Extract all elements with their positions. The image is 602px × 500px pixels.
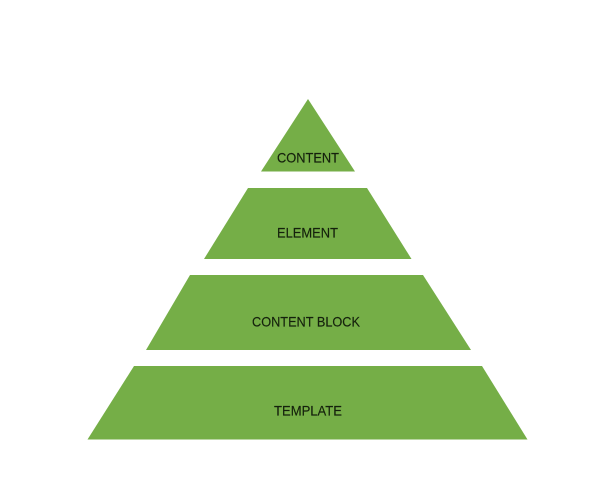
tier 3: content block	[146, 275, 471, 350]
tier 2: element: ELEMENT	[277, 226, 338, 240]
tier 4: template	[88, 366, 528, 440]
tier 3: content block: CONTENT BLOCK	[252, 314, 360, 330]
tier 4: template: TEMPLATE	[274, 404, 342, 418]
tier 1: content	[261, 99, 355, 172]
tier 2: element	[204, 188, 412, 259]
tier 1: content: CONTENT	[277, 150, 339, 166]
